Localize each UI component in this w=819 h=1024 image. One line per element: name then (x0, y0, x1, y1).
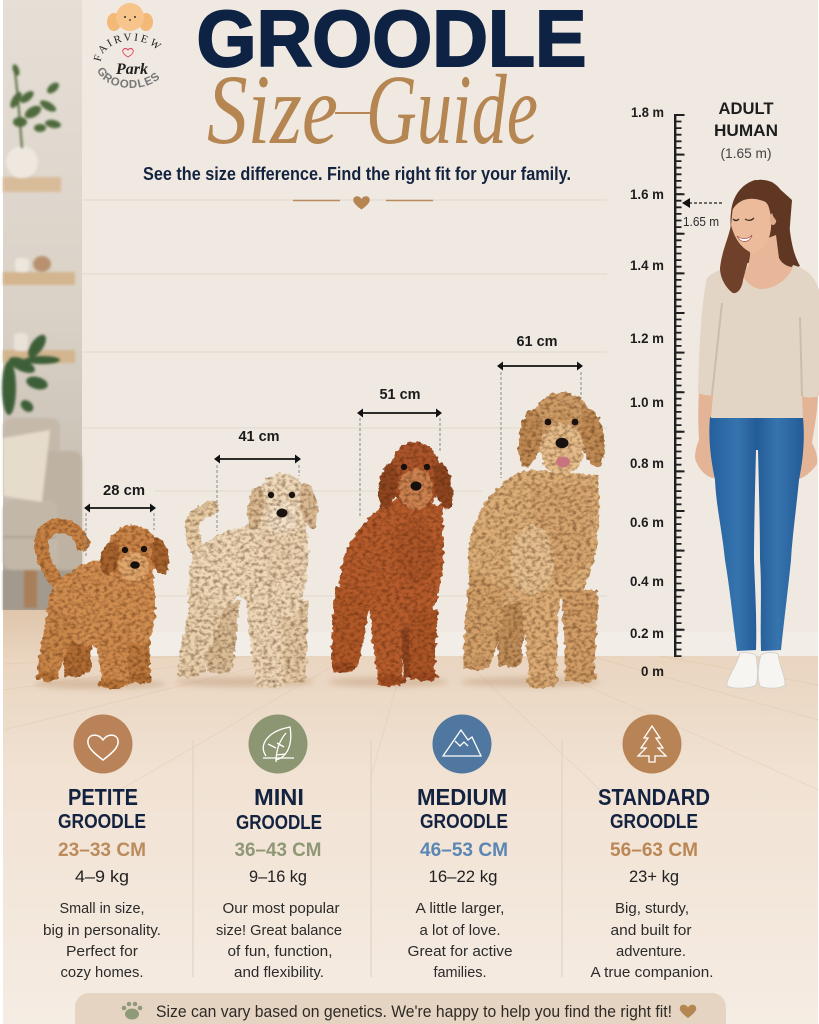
height arrow 28 cm (84, 482, 156, 558)
medium face (401, 464, 430, 491)
mini description (216, 900, 342, 981)
logo puppy (107, 3, 153, 31)
shoes (727, 653, 785, 688)
tagline: See the size difference. Find the right fit for your family. (143, 164, 571, 184)
petite height: 23–33 CM (58, 840, 146, 861)
woman figure (695, 180, 819, 688)
height arrow 28 cm: 28 cm (103, 482, 145, 499)
logo park: Park (115, 61, 148, 78)
petite name: PETITE (68, 784, 138, 810)
divider with heart (293, 196, 433, 210)
height arrow 41 cm: 41 cm (238, 428, 280, 445)
logo groodles: GROODLES (98, 68, 159, 88)
mini description: of fun, function, (228, 943, 332, 960)
height arrow 61 cm: 61 cm (516, 333, 558, 350)
ruler (630, 104, 680, 679)
standard description: and built for (610, 922, 692, 939)
vase (6, 146, 38, 178)
jeans (709, 417, 804, 651)
icon: leaf (248, 714, 308, 774)
card: petite (43, 714, 161, 981)
ruler labels: 0.4 m (630, 573, 664, 589)
hair back (730, 180, 800, 274)
logo (94, 3, 162, 88)
adult human label: (1.65 m) (720, 145, 772, 161)
hair top (731, 180, 792, 250)
medium height: 46–53 CM (420, 840, 508, 861)
ruler labels: 0 m (641, 663, 664, 679)
dog: petite groodle (37, 525, 172, 689)
dog: medium groodle (332, 442, 456, 686)
standard name: STANDARD (598, 784, 710, 810)
petite description (43, 900, 161, 981)
petite description: big in personality. (43, 922, 161, 939)
footer note (75, 993, 726, 1024)
petite face (122, 546, 147, 569)
human height marker (682, 198, 723, 229)
medium description: Great for active (408, 943, 512, 960)
standard face (545, 419, 578, 468)
mini height: 36–43 CM (234, 840, 322, 861)
logo text fairview: FAIRVIEW (94, 33, 162, 62)
ruler labels: 1.2 m (630, 330, 664, 346)
dog shadows (34, 677, 600, 689)
wall grid lines (45, 200, 607, 596)
standard description (590, 900, 714, 981)
ruler spine (674, 114, 676, 657)
shelf lower (3, 350, 75, 363)
ruler labels: 1.0 m (630, 394, 664, 410)
icon: mountains (432, 714, 492, 774)
dog: mini groodle (177, 473, 321, 688)
card: medium (408, 714, 512, 981)
petite description: cozy homes. (60, 964, 144, 981)
mini weight: 9–16 kg (249, 867, 307, 886)
adult human label: ADULT (718, 99, 774, 118)
human height marker: 1.65 m (683, 215, 719, 229)
medium description: A little larger, (416, 900, 504, 917)
mini name: MINI (254, 784, 304, 810)
mini description: Our most popular (222, 900, 340, 917)
medium description: families. (434, 964, 486, 981)
ruler labels: 1.6 m (630, 186, 664, 202)
subtitle script (207, 54, 538, 165)
icon: heart (74, 714, 132, 774)
baseboard (82, 632, 818, 656)
medium name: MEDIUM (417, 784, 507, 810)
floor (3, 610, 819, 1024)
plant upper (8, 63, 62, 148)
ruler labels: 0.8 m (630, 455, 664, 471)
adult human label: HUMAN (714, 121, 778, 140)
mini groodle label: GROODLE (236, 812, 322, 834)
ruler labels (630, 104, 664, 679)
icon: tree (622, 714, 682, 774)
ruler minor ticks (676, 114, 682, 657)
shelf objects (15, 256, 51, 272)
shelf upper (3, 177, 61, 192)
height arrow 41 cm (214, 428, 301, 531)
standard weight: 23+ kg (629, 867, 679, 886)
eyes (733, 218, 754, 220)
mini description: and flexibility. (234, 964, 324, 981)
petite groodle label: GROODLE (58, 811, 146, 833)
medium groodle label: GROODLE (420, 811, 508, 833)
sweater shading (712, 303, 802, 396)
left arm (695, 390, 714, 478)
adult human label (714, 99, 778, 161)
card: mini (216, 714, 342, 981)
sofa (3, 418, 82, 610)
mini face (268, 492, 295, 518)
ruler labels: 0.6 m (630, 514, 664, 530)
standard description: adventure. (616, 943, 686, 960)
footer text: Size can vary based on genetics. We're happy to help you find the right fit! (156, 1003, 672, 1021)
mini description: size! Great balance (216, 922, 342, 939)
petite description: Small in size, (60, 900, 144, 917)
icon: footer heart (680, 1005, 696, 1018)
petite description: Perfect for (66, 943, 138, 960)
petite weight: 4–9 kg (75, 867, 129, 886)
medium description: a lot of love. (420, 922, 500, 939)
ruler labels: 1.4 m (630, 257, 664, 273)
sweater (698, 265, 819, 418)
card: standard (590, 714, 714, 981)
standard groodle label: GROODLE (610, 811, 698, 833)
height arrow 51 cm (357, 386, 442, 516)
height arrow 61 cm (497, 333, 583, 478)
medium description (408, 900, 512, 981)
ruler labels: 1.8 m (631, 104, 664, 120)
logo heart (123, 48, 133, 57)
smile (737, 235, 752, 242)
ruler labels: 0.2 m (630, 625, 664, 641)
subtitle script: Guide (366, 54, 538, 165)
standard description: Big, sturdy, (615, 900, 689, 917)
icon: paw (122, 1002, 142, 1020)
background wall (3, 0, 818, 660)
dog: standard groodle (463, 392, 608, 688)
standard description: A true companion. (590, 964, 714, 981)
height arrow 51 cm: 51 cm (380, 386, 420, 403)
card dividers (193, 740, 562, 977)
left room panel (2, 0, 82, 612)
ear (770, 213, 776, 225)
medium weight: 16–22 kg (428, 867, 498, 886)
face (731, 196, 771, 253)
ruler major ticks (676, 114, 684, 657)
neck (743, 235, 793, 289)
right arm (797, 390, 818, 479)
hair left lock (720, 225, 750, 293)
plant lower (2, 332, 60, 415)
shelf middle (3, 272, 75, 285)
standard height: 56–63 CM (610, 840, 698, 861)
subtitle script: Size (207, 54, 338, 165)
